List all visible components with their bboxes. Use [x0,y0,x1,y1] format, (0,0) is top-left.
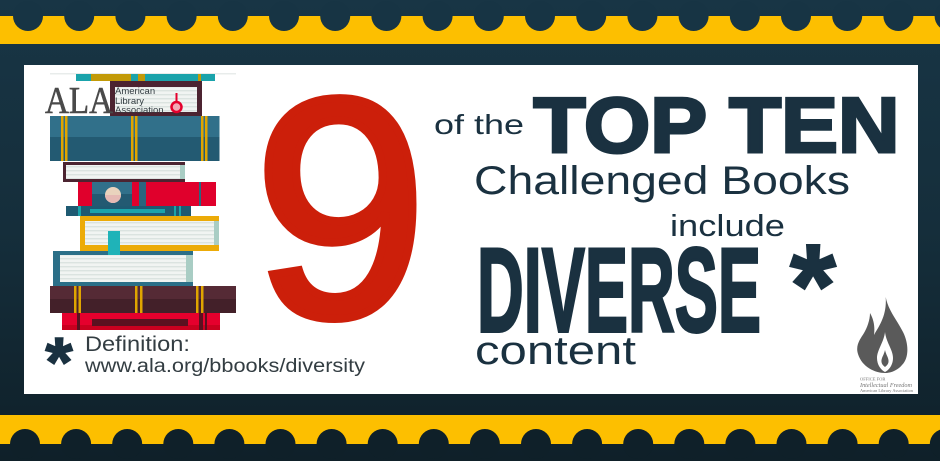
Challenged Books: Challenged Books [474,159,850,203]
content: content [475,329,636,373]
big number 9: 9 [254,35,427,383]
book 5: red with teal panel [78,182,216,206]
ALA logo [45,80,164,122]
TOP TEN: TOP TEN [534,81,900,169]
bottom scalloped yellow band [0,415,940,459]
Office for Intellectual Freedom logo [857,297,913,393]
ALA logo: American [115,86,155,97]
book 1: thin teal and gold [76,74,215,81]
ALA logo: Association [115,105,164,116]
book 7: gold with pages [80,216,219,251]
logo caption [859,376,913,393]
book 8: teal with pages [53,251,193,286]
url: www.ala.org/bbooks/diversity [84,356,366,377]
book 10: red base [62,313,220,330]
ALA logo: ALA [45,80,113,122]
headline [434,81,900,373]
top scalloped yellow band [0,1,940,44]
book 9: large maroon [50,286,236,313]
definition text: Definition: [85,333,190,356]
of the: of the [434,109,524,140]
book 2: maroon with pages and bookmark [110,81,202,116]
book 6: thin dark teal [66,206,191,216]
logo caption: OFFICE FOR [860,376,885,382]
definition note [45,323,366,401]
book 4: maroon with pages [63,162,185,182]
icon: flame [857,297,907,373]
white main panel [24,65,918,394]
include: include [670,208,785,243]
large asterisk: * [790,220,836,352]
illustration: stack of books [50,73,236,330]
small asterisk: * [45,323,73,401]
ALA logo: Library [115,96,144,107]
bookmark [108,231,120,255]
book 3: large teal [50,116,220,161]
logo caption: Intellectual Freedom [859,383,912,389]
logo caption: American Library Association [860,389,913,393]
